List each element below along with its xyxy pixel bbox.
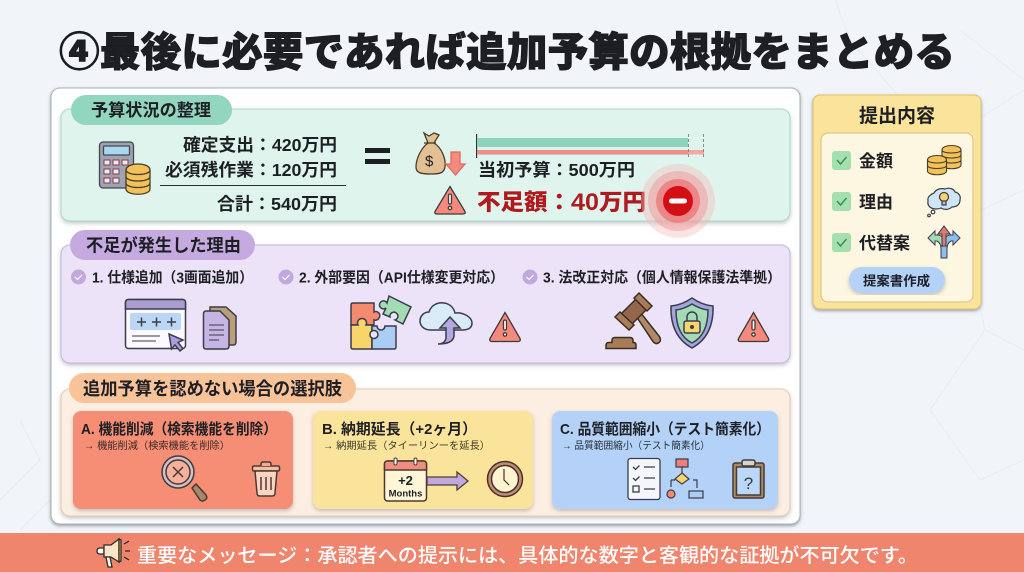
icon: money bag with down arrow: $ bbox=[425, 153, 434, 170]
icon: shield bbox=[671, 298, 713, 348]
icon: gavel bbox=[606, 293, 660, 348]
button: create proposal bbox=[849, 267, 945, 293]
icon: coins bbox=[928, 146, 961, 175]
heading: reasons: 不足が発生した理由 bbox=[86, 236, 241, 256]
card C: quality scope: → 品質範囲縮小（テスト簡素化） bbox=[562, 439, 710, 452]
panel: options bbox=[61, 373, 790, 516]
card A: scope reduction bbox=[73, 411, 293, 509]
text: budget calculation: 合計：540万円 bbox=[217, 194, 337, 214]
card B: schedule extension bbox=[313, 411, 533, 509]
text: budget calculation bbox=[160, 135, 346, 214]
icon: trash can bbox=[252, 462, 280, 496]
text: budget calculation: 確定支出：420万円 bbox=[183, 135, 337, 155]
reason 2: 2. 外部要因（API仕様変更対応） bbox=[299, 268, 504, 286]
card A: scope reduction: → 機能削減（検索機能を削除） bbox=[84, 439, 230, 452]
card C: quality scope: C. 品質範囲縮小（テスト簡素化） bbox=[560, 420, 770, 438]
panel: main card bbox=[51, 88, 800, 524]
icon: checklist bbox=[628, 458, 660, 500]
heading: submission: 提出内容 bbox=[859, 105, 935, 127]
icon: warning bbox=[738, 312, 769, 342]
icon: warning bbox=[490, 312, 520, 342]
item: amount bbox=[832, 151, 893, 171]
card A: scope reduction: A. 機能削減（検索機能を削除） bbox=[81, 420, 277, 438]
title: ④最後に必要であれば追加予算の根拠をまとめる bbox=[59, 29, 955, 75]
icon: clipboard question: ? bbox=[744, 474, 753, 493]
text: shortfall: 不足額：40万円 bbox=[477, 189, 646, 216]
icon: calendar +2 months: +2 bbox=[398, 473, 413, 488]
text: budget calculation: 必須残作業：120万円 bbox=[165, 160, 337, 180]
panel: reasons bbox=[61, 230, 790, 363]
chart: budget bars bbox=[476, 134, 704, 158]
icon: warning bbox=[435, 186, 465, 214]
equals sign bbox=[365, 148, 390, 164]
text: key message: 重要なメッセージ：承認者への提示には、具体的な数字と客観的な証拠が不可欠です。 bbox=[137, 544, 918, 567]
item: reason bbox=[832, 192, 893, 212]
icon: puzzle bbox=[351, 296, 411, 349]
icon: calendar +2 months bbox=[384, 458, 426, 501]
item: reason: 理由 bbox=[859, 193, 893, 212]
card B: schedule extension: → 納期延長（タイーリンーを延長） bbox=[323, 439, 490, 452]
icon: minus alert bbox=[641, 164, 715, 238]
icon: clipboard question bbox=[733, 460, 764, 498]
button: create proposal: 提案書作成 bbox=[863, 274, 930, 288]
icon: clock bbox=[488, 462, 522, 496]
icon: arrow bbox=[427, 472, 468, 490]
icon: browser add screens bbox=[126, 300, 186, 351]
icon: flow chart bbox=[667, 459, 703, 498]
panel: budget status bbox=[61, 95, 790, 238]
heading: budget status: 予算状況の整理 bbox=[91, 100, 211, 120]
icon: branching arrows bbox=[928, 226, 960, 258]
heading: options bbox=[69, 373, 356, 403]
icon: megaphone bbox=[97, 539, 130, 567]
item: amount: 金額 bbox=[859, 151, 893, 171]
reason 3: 3. 法改正対応（個人情報保護法準拠） bbox=[543, 268, 781, 286]
heading: options: 追加予算を認めない場合の選択肢 bbox=[83, 378, 342, 399]
icon: thought bubble with bulb bbox=[928, 188, 960, 217]
icon: magnifier bbox=[162, 456, 207, 501]
card B: schedule extension: B. 納期延長（+2ヶ月） bbox=[322, 421, 477, 438]
item: alternative: 代替案 bbox=[859, 234, 910, 253]
panel: submission contents bbox=[813, 95, 981, 309]
card C: quality scope bbox=[552, 411, 778, 509]
text: initial budget: 当初予算：500万円 bbox=[478, 160, 635, 180]
icon: documents bbox=[204, 307, 236, 349]
icon: calendar +2 months: Months bbox=[389, 488, 422, 500]
icon: cloud upload bbox=[420, 303, 472, 344]
heading: budget status bbox=[71, 95, 232, 125]
heading: reasons bbox=[70, 230, 255, 260]
icon: money bag with down arrow bbox=[416, 133, 465, 175]
reason 1: 1. 仕様追加（3画面追加） bbox=[92, 268, 253, 286]
icon: calculator and coins bbox=[100, 142, 150, 194]
item: alternative bbox=[832, 233, 910, 253]
banner: key message bbox=[0, 533, 1024, 572]
